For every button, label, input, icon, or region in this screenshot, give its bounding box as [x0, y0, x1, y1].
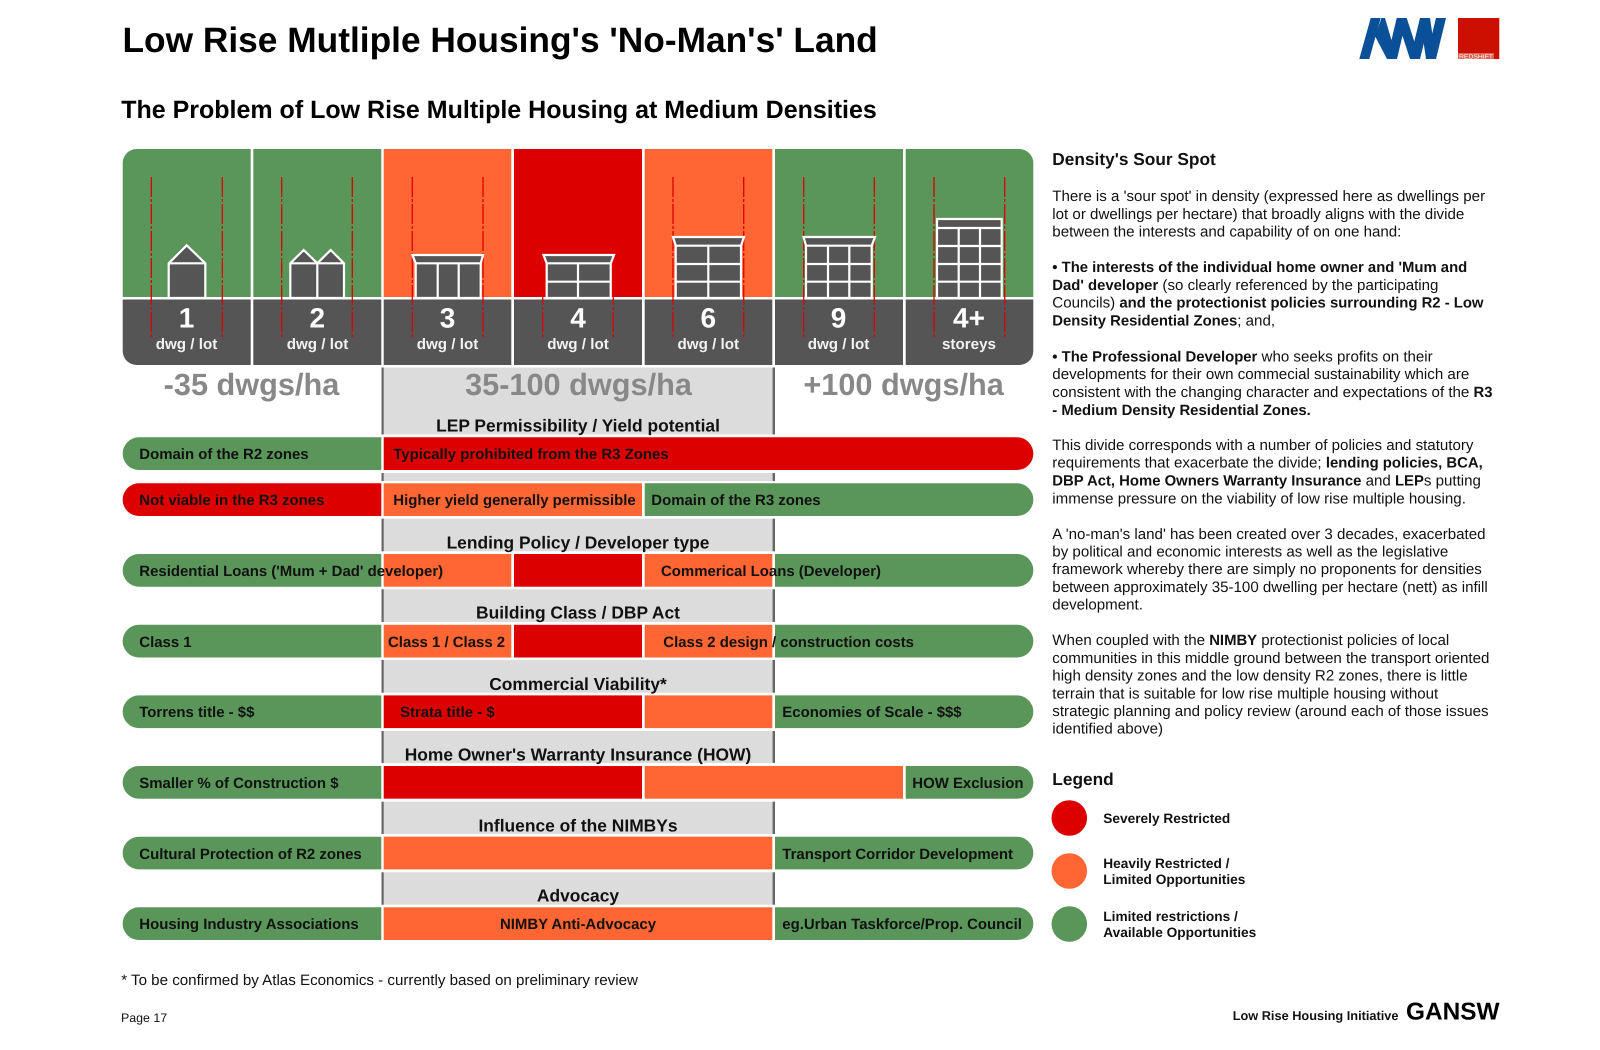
- row: lending: Commerical Loans (Developer): [661, 563, 881, 580]
- body text: When coupled with the NIMBY protectionist policies of local: [1052, 632, 1449, 649]
- column labels: dwg / lot: [417, 336, 478, 353]
- row: commercial viability: [123, 695, 1033, 728]
- row: commercial viability: Torrens title - $$: [139, 704, 255, 721]
- logos: [1359, 18, 1499, 61]
- body text: high density zones and the low density R2 zones, there is little: [1052, 668, 1468, 684]
- body text: between the interests and capability of on one hand:: [1052, 224, 1401, 240]
- row: advocacy: Housing Industry Associations: [139, 916, 359, 933]
- section heading: lending: Lending Policy / Developer type: [447, 532, 710, 552]
- row: NIMBY: [123, 837, 1033, 869]
- body text: communities in this middle ground between the transport oriented: [1052, 650, 1489, 667]
- section heading: NIMBY: Influence of the NIMBYs: [478, 816, 678, 836]
- body text: requirements that exacerbate the divide; lending policies, BCA,: [1052, 455, 1483, 472]
- body text: by political and economic interests as well as the legislative: [1052, 543, 1448, 560]
- body text: This divide corresponds with a number of policies and statutory: [1052, 437, 1474, 454]
- central grey band: [382, 368, 775, 905]
- density columns panel: [123, 149, 1033, 365]
- body text: between approximately 35-100 dwelling per hectare (nett) as infill: [1052, 579, 1488, 596]
- row: HOW: HOW Exclusion: [912, 775, 1024, 792]
- body text: - Medium Density Residential Zones.: [1052, 403, 1311, 419]
- body text: • The interests of the individual home owner and 'Mum and: [1052, 260, 1467, 276]
- density range headings: [164, 367, 1005, 402]
- title: Low Rise Mutliple Housing's 'No-Man's' Land: [122, 21, 878, 60]
- body text: Dad' developer (so clearly referenced by the participating: [1052, 277, 1438, 294]
- column labels: 4+: [953, 302, 985, 334]
- row: lending: Residential Loans ('Mum + Dad' developer): [139, 563, 443, 580]
- density range headings: +100 dwgs/ha: [803, 367, 1005, 402]
- icon: building 4 dwellings: [544, 255, 614, 298]
- column labels: 9: [831, 302, 846, 334]
- column labels: dwg / lot: [156, 336, 217, 353]
- density range headings: 35-100 dwgs/ha: [465, 367, 693, 402]
- page number: Page 17: [121, 1011, 167, 1025]
- body text: A 'no-man's land' has been created over 3 decades, exacerbated: [1052, 526, 1486, 543]
- row: building class: Class 1: [139, 634, 192, 651]
- row: building class: Class 2 design / construction costs: [663, 634, 914, 651]
- body text: framework whereby there are simply no proponents for densities: [1052, 561, 1482, 578]
- column labels: 3: [440, 302, 455, 334]
- legend item: heavily restricted: [1052, 853, 1246, 889]
- column colour blocks: [123, 149, 1033, 297]
- body text: • The Professional Developer who seeks profits on their: [1052, 348, 1433, 365]
- body text: [1052, 188, 1493, 738]
- section heading: commercial viability: Commercial Viability*: [489, 674, 667, 694]
- column labels: storeys: [942, 336, 996, 353]
- icon: building 4+ storeys: [937, 219, 1002, 298]
- legend heading: Legend: [1052, 769, 1114, 789]
- body text: There is a 'sour spot' in density (expressed here as dwellings per: [1052, 188, 1485, 205]
- section heading: building class: Building Class / DBP Act: [476, 602, 680, 622]
- section heading: LEP: LEP Permissibility / Yield potential: [436, 416, 720, 436]
- icon: house 1 dwelling: [169, 245, 205, 298]
- section heading: HOW: Home Owner's Warranty Insurance (HOW): [405, 745, 751, 765]
- row: yield: Domain of the R3 zones: [651, 492, 821, 509]
- subtitle: The Problem of Low Rise Multiple Housing at Medium Densities: [121, 96, 877, 124]
- legend item: severely restricted: [1052, 800, 1230, 836]
- row: yield: Not viable in the R3 zones: [139, 492, 324, 509]
- icon: building 6 dwellings: [673, 237, 744, 298]
- column labels: dwg / lot: [547, 336, 609, 353]
- row: building class: [123, 625, 1033, 658]
- grey label band: [123, 300, 1033, 365]
- row: advocacy: [123, 907, 1033, 940]
- body text: lot or dwellings per hectare) that broadly aligns with the divide: [1052, 206, 1464, 223]
- column labels: 1: [179, 302, 194, 334]
- row: yield: [123, 483, 1033, 516]
- body text: strategic planning and policy review (around each of those issues: [1052, 703, 1489, 720]
- row: HOW: [123, 766, 1033, 799]
- footnote: * To be confirmed by Atlas Economics - currently based on preliminary review: [121, 972, 638, 989]
- body text: developments for their own commecial sustainability which are: [1052, 366, 1469, 383]
- row: building class: Class 1 / Class 2: [388, 634, 505, 651]
- section heading: advocacy: Advocacy: [537, 886, 619, 906]
- legend item: limited restrictions: Available Opportunities: [1103, 925, 1257, 940]
- row: lending: [123, 554, 1033, 587]
- legend item: limited restrictions: Limited restrictions /: [1103, 909, 1238, 924]
- row: yield: Higher yield generally permissible: [393, 492, 636, 509]
- row: commercial viability: Strata title - $: [400, 704, 495, 721]
- legend item: heavily restricted: Limited Opportunities: [1103, 872, 1246, 887]
- row: HOW: Smaller % of Construction $: [139, 775, 339, 792]
- legend item: severely restricted: Severely Restricted: [1103, 811, 1230, 826]
- logo: Redshift: REDSHIFT: [1459, 54, 1493, 61]
- footer branding: [1233, 998, 1500, 1025]
- legend: [1052, 769, 1257, 942]
- row: LEP zones: Domain of the R2 zones: [139, 446, 309, 463]
- icon: house 2 dwellings: [290, 250, 344, 298]
- logo: MW: [1359, 18, 1446, 59]
- row: NIMBY: Transport Corridor Development: [782, 846, 1013, 863]
- heading: Density's Sour Spot: Density's Sour Spot: [1052, 149, 1216, 169]
- column labels: dwg / lot: [287, 336, 348, 353]
- row: LEP zones: [123, 437, 1033, 470]
- column labels: 4: [570, 302, 586, 334]
- body text: Density Residential Zones; and,: [1052, 312, 1275, 329]
- column labels: 6: [701, 302, 716, 334]
- body text: development.: [1052, 597, 1143, 614]
- body text: identified above): [1052, 721, 1163, 738]
- body text: terrain that is suitable for low rise multiple housing without: [1052, 685, 1439, 702]
- footer branding: Low Rise Housing Initiative: [1233, 1008, 1398, 1023]
- setback lines: [151, 177, 1005, 337]
- row: NIMBY: Cultural Protection of R2 zones: [139, 846, 362, 863]
- legend item: heavily restricted: Heavily Restricted /: [1103, 856, 1230, 871]
- icon: building 3 dwellings: [412, 255, 483, 298]
- column labels: dwg / lot: [678, 336, 739, 353]
- column labels: dwg / lot: [808, 336, 869, 353]
- column labels: 2: [310, 302, 325, 334]
- row: advocacy: NIMBY Anti-Advocacy: [500, 916, 657, 933]
- icon: building 9 dwellings: [804, 237, 875, 298]
- body text: DBP Act, Home Owners Warranty Insurance and LEPs putting: [1052, 473, 1481, 490]
- column labels: [156, 302, 996, 353]
- row: commercial viability: Economies of Scale - $$$: [782, 704, 962, 721]
- body text: consistent with the changing character and expectations of the R3: [1052, 384, 1493, 401]
- row: advocacy: eg.Urban Taskforce/Prop. Council: [782, 916, 1022, 933]
- body text: Councils) and the protectionist policies surrounding R2 - Low: [1052, 295, 1484, 312]
- footer branding: GANSW: [1406, 998, 1500, 1025]
- density range headings: -35 dwgs/ha: [164, 367, 340, 402]
- legend item: limited restrictions: [1052, 906, 1257, 942]
- row: LEP zones: Typically prohibited from the R3 Zones: [393, 446, 669, 463]
- body text: immense pressure on the viability of low rise multiple housing.: [1052, 491, 1466, 508]
